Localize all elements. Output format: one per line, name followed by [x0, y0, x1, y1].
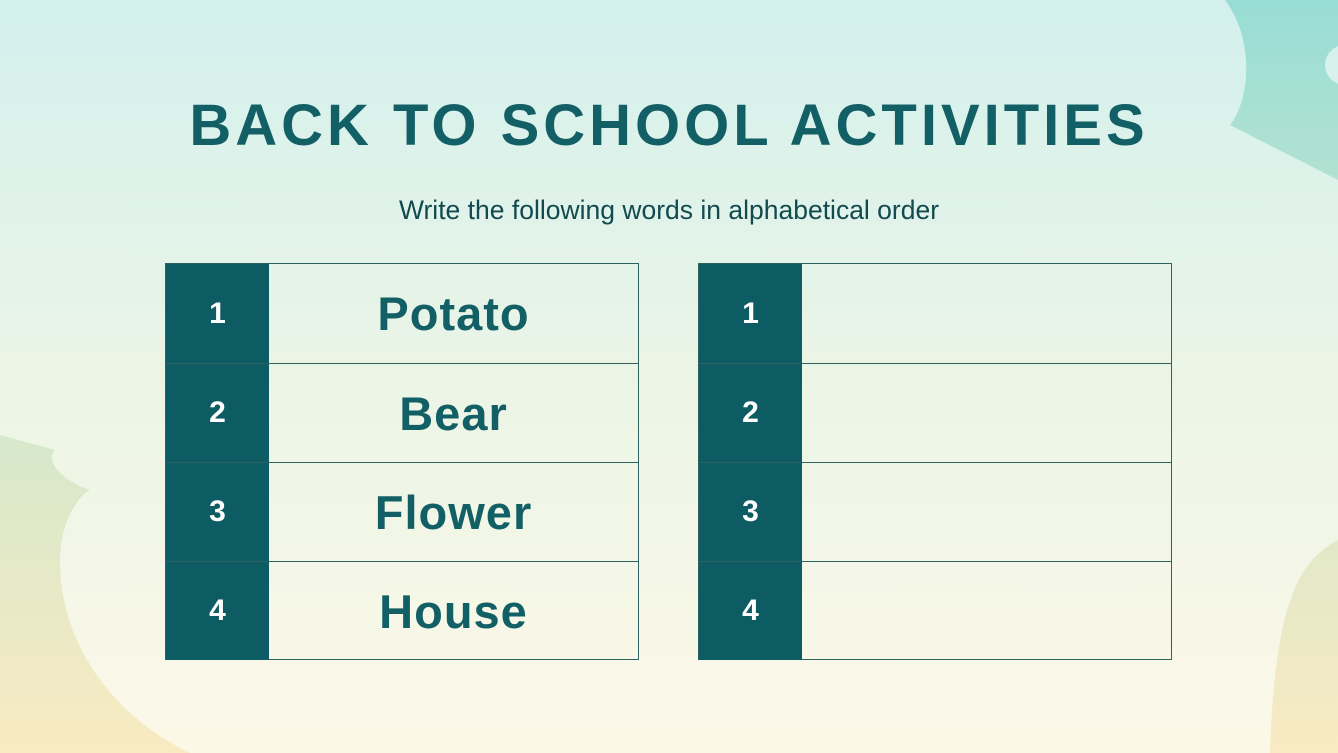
panel: answer table: 3 — [742, 495, 759, 528]
panel: word list table: House — [379, 584, 528, 638]
panel: answer table — [698, 263, 1172, 660]
panel: word list table: Bear — [399, 386, 508, 440]
panel: word list table: 3 — [209, 495, 226, 528]
subtitle: Write the following words in alphabetical order — [399, 195, 939, 225]
panel: word list table: Potato — [377, 287, 530, 340]
panel: word list table: Flower — [375, 486, 532, 538]
panel: answer table: 2 — [742, 396, 759, 429]
panel: word list table: 2 — [209, 396, 226, 429]
title: BACK TO SCHOOL ACTIVITIES — [189, 93, 1149, 158]
panel: word list table: 4 — [209, 594, 226, 627]
panel: word list table — [165, 263, 639, 660]
panel: answer table: 1 — [742, 296, 759, 330]
panel: word list table: 1 — [209, 296, 226, 330]
panel: answer table: 4 — [742, 594, 759, 627]
